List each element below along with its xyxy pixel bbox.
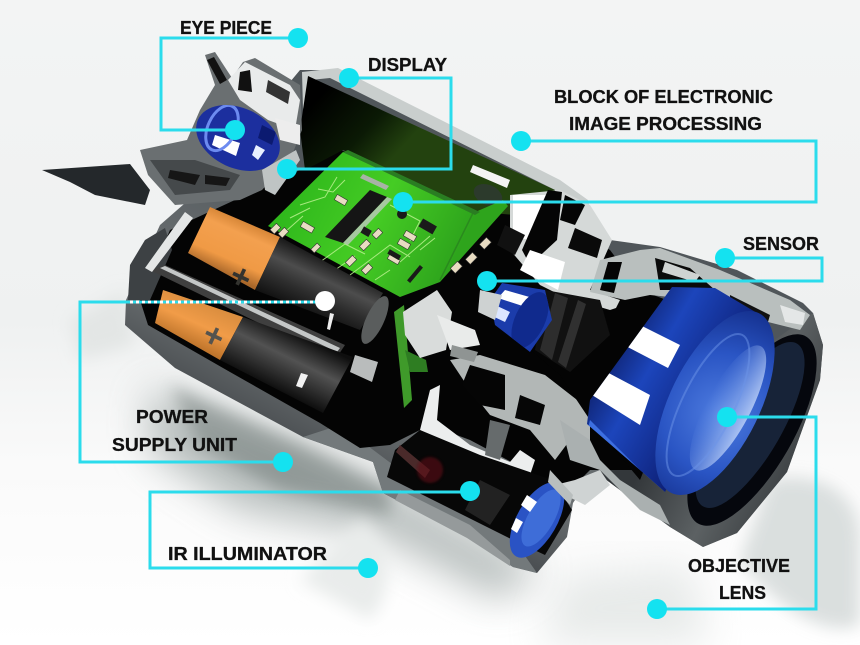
callout: objective lens: OBJECTIVE [688,556,790,576]
callout: eye piece: EYE PIECE [180,18,272,38]
callout: power supply unit: SUPPLY UNIT [112,435,237,455]
icon: objective lens glass [631,293,799,513]
callout: power supply unit: POWER [136,407,208,427]
vertical circuit board and white connector [394,290,480,408]
lower section structure [395,355,670,566]
device housing [42,52,842,573]
objective barrel interior [576,287,817,526]
cross-section structure [497,190,810,330]
callout: eye piece [161,18,308,140]
callout: sensor: SENSOR [743,234,819,254]
callout: block of electronic image processing: IMAGE PROCESSING [569,114,762,134]
battery two [155,290,243,360]
callout: objective lens [647,407,816,619]
background shadows [70,290,860,645]
callout: IR illuminator [150,481,480,578]
microchip [325,190,387,243]
batteries: + [197,315,231,358]
callout: block of electronic image processing: BLOCK OF ELECTRONIC [554,87,773,107]
printed circuit board [268,150,508,297]
callout: power supply unit [80,291,335,472]
callout: objective lens: LENS [719,583,766,603]
icon: sensor lens group [478,283,610,372]
callout: sensor [477,234,822,291]
callout: display [277,55,451,179]
interior cavity [140,150,720,490]
eye piece assembly [42,52,302,205]
batteries: + [224,256,258,299]
IR illuminator [387,430,575,566]
metal rod [150,265,345,360]
callout: display: DISPLAY [368,55,447,75]
callout: IR illuminator: IR ILLUMINATOR [168,544,327,564]
batteries [128,207,394,413]
battery one [188,207,280,290]
callout: block of electronic image processing [393,87,816,212]
upper compartment shell [302,68,594,240]
small components [270,194,491,275]
